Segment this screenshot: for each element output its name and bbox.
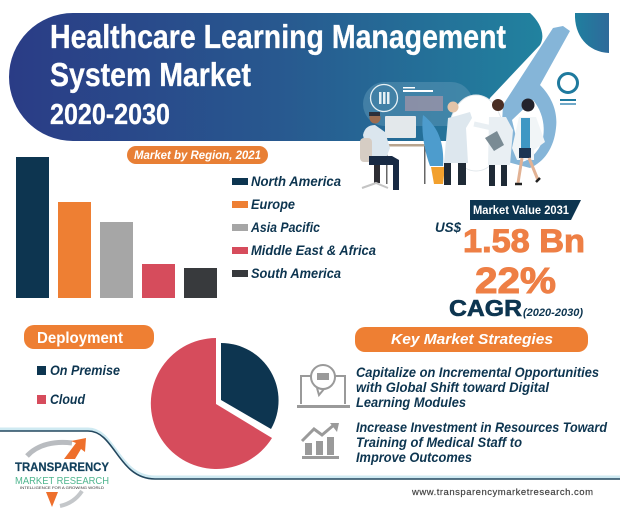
strategy text one: Learning Modules — [356, 394, 466, 410]
logo — [15, 438, 109, 507]
region legend: South America — [251, 265, 341, 281]
region badge: Market by Region, 2021 — [134, 150, 261, 162]
logo: TRANSPARENCY — [15, 460, 109, 474]
CAGR figure: (2020-2030) — [523, 307, 583, 319]
region legend: Middle East & Africa — [251, 242, 376, 258]
market value label — [470, 200, 581, 220]
doctor 3 — [512, 98, 545, 184]
website url: www.transparencymarketresearch.com — [411, 487, 593, 498]
title: Healthcare Learning Management — [50, 18, 506, 55]
CAGR figure: 22% — [475, 260, 556, 301]
strategies badge — [355, 327, 588, 352]
illustration: medical staff — [360, 82, 545, 190]
footer curve — [0, 429, 620, 479]
icon: growth chart — [302, 423, 339, 459]
deployment legend: Cloud — [50, 391, 85, 407]
deployment badge — [24, 325, 154, 349]
strategy text one: Capitalize on Incremental Opportunities — [356, 364, 599, 380]
strategy text one — [356, 364, 599, 410]
region badge — [127, 146, 268, 164]
microscope shape — [500, 26, 570, 168]
market value label: Market Value 2031 — [473, 203, 569, 217]
corner accent — [575, 13, 609, 53]
title: 2020-2030 — [50, 99, 170, 131]
deployment badge: Deployment — [37, 330, 124, 347]
logo: MARKET RESEARCH — [15, 475, 109, 487]
market value figure: 1.58 Bn — [463, 223, 585, 259]
strategy text one: with Global Shift toward Digital — [356, 379, 550, 395]
market value figure: US$ — [435, 219, 461, 235]
CAGR figure — [449, 260, 583, 321]
title — [50, 18, 506, 131]
strategy text two: Improve Outcomes — [356, 449, 472, 465]
title: System Market — [50, 56, 251, 93]
desk worker — [360, 112, 428, 190]
deployment legend: On Premise — [50, 362, 120, 378]
bar chart — [16, 157, 217, 298]
market value figure — [435, 219, 585, 259]
CAGR figure: CAGR — [449, 295, 522, 321]
region legend: Asia Pacific — [250, 219, 320, 235]
deployment legend — [37, 362, 120, 407]
doctor 2 — [474, 99, 513, 186]
strategy text two — [356, 419, 607, 465]
strategies badge: Key Market Strategies — [391, 331, 553, 348]
header banner — [9, 13, 542, 141]
icon: laptop with graduation bubble — [297, 365, 350, 408]
region legend: Europe — [251, 196, 295, 212]
region legend — [232, 173, 376, 281]
doctor 1 — [444, 102, 472, 185]
icon: ring and dashes — [558, 74, 578, 105]
pie chart — [151, 338, 279, 469]
strategy text two: Training of Medical Staff to — [356, 434, 522, 450]
region legend: North America — [251, 173, 341, 189]
logo: INTELLIGENCE FOR A GROWING WORLD — [20, 486, 105, 490]
plant — [422, 115, 445, 184]
